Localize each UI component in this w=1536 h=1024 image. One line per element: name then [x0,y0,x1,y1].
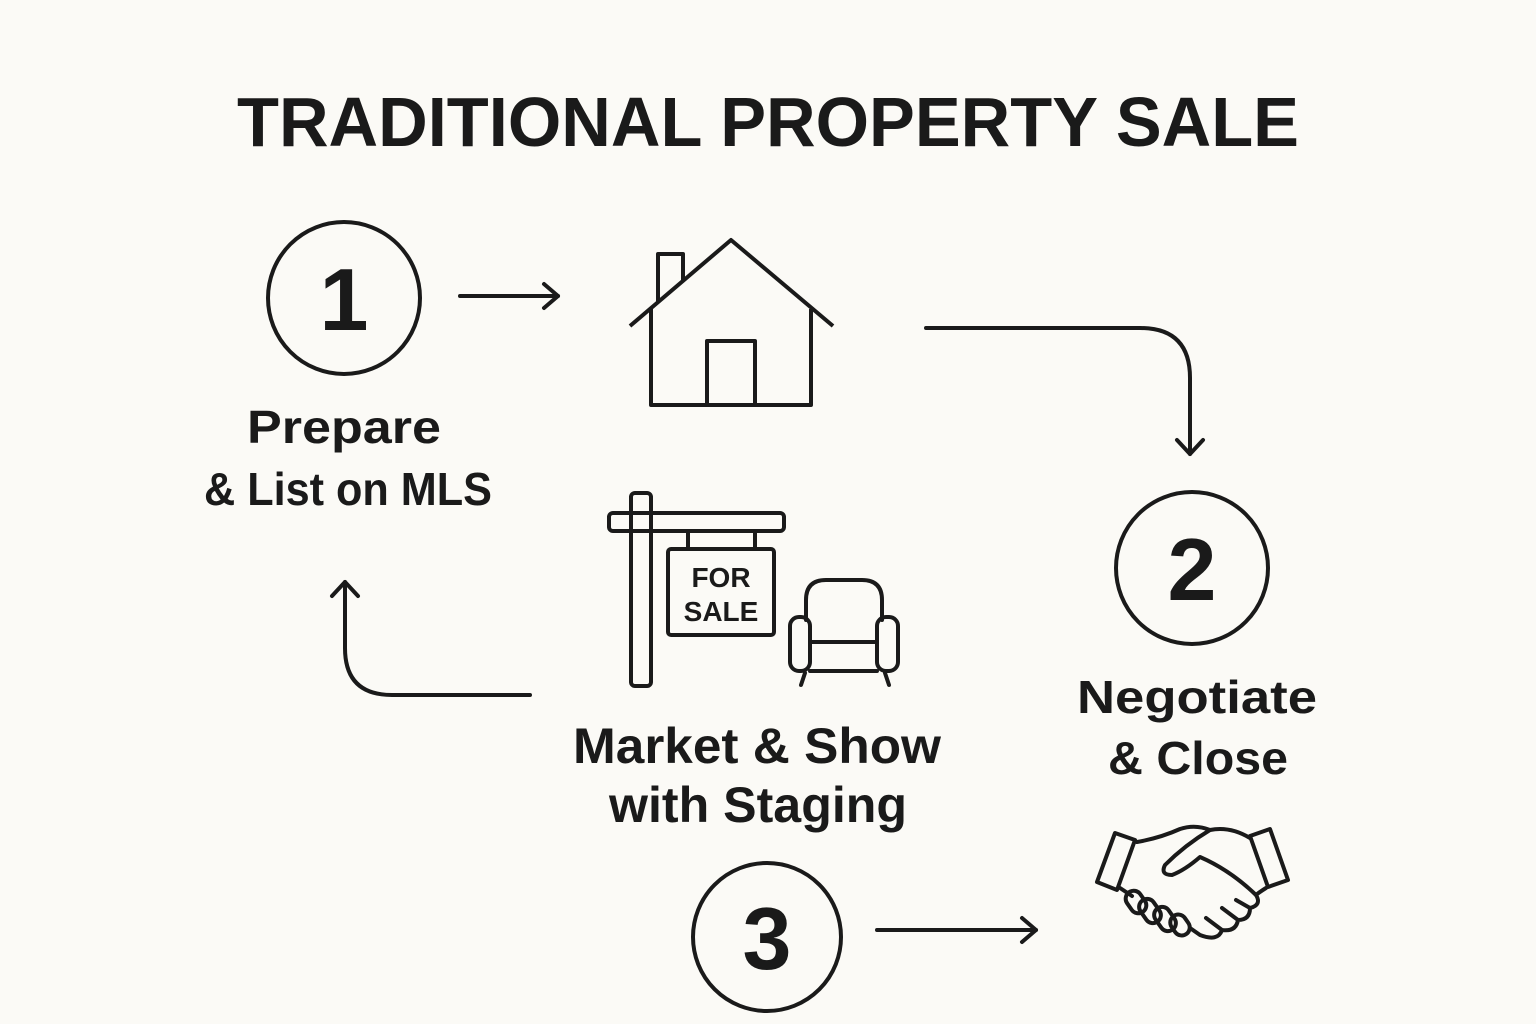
step 3 label: Market & Show [573,718,941,774]
step 2 label: Negotiate [1077,671,1317,723]
step 1 label: Prepare [247,401,441,453]
icon: house [630,240,833,405]
arrow: 1 to house [460,284,558,308]
step 2 circle: 2 [1168,520,1216,619]
step 3 circle [693,863,841,1011]
step 2 label [1077,671,1317,784]
arrow: house to step 2 [926,328,1203,454]
step 1 circle: 1 [320,250,368,349]
icon: armchair [790,580,898,685]
step 2 circle [1116,492,1268,644]
step 1 circle [268,222,420,374]
icon: for sale sign [609,493,784,686]
icon: for sale sign: FOR [691,562,751,593]
step 3 label [573,718,941,833]
step 1 label [204,401,492,515]
title: TRADITIONAL PROPERTY SALE [237,83,1299,161]
icon: for sale sign: SALE [684,596,758,627]
step 1 label: & List on MLS [204,463,492,515]
icon: handshake [1097,827,1288,939]
arrow: 3 to handshake [877,918,1036,942]
step 2 label: & Close [1108,732,1288,784]
arrow: back to step 1 [332,582,530,695]
step 3 circle: 3 [743,889,791,988]
step 3 label: with Staging [608,777,907,833]
